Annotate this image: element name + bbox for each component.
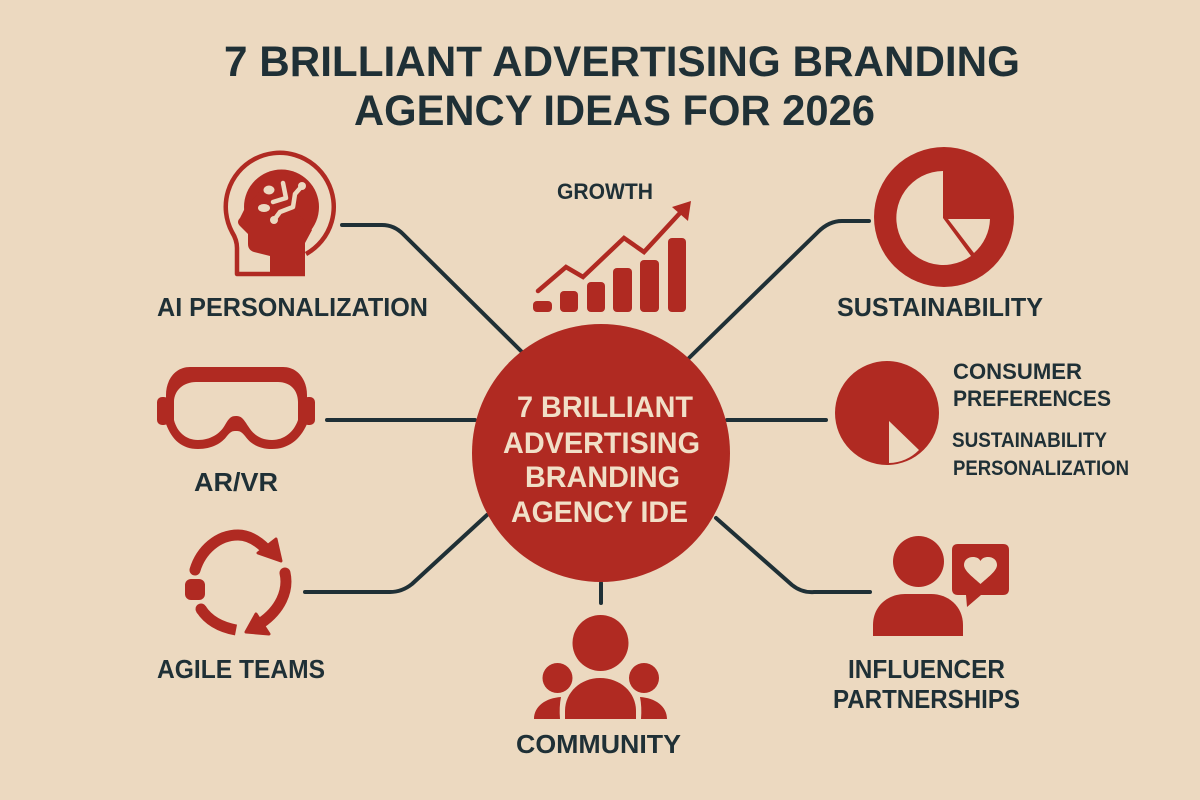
label: PARTNERSHIPS bbox=[833, 684, 1020, 714]
connector: AR/VR bbox=[327, 418, 475, 422]
label: AI PERSONALIZATION bbox=[157, 292, 428, 322]
list: PERSONALIZATION bbox=[953, 457, 1129, 480]
title bbox=[224, 38, 1020, 135]
connector: agile teams bbox=[305, 515, 487, 592]
node: agile teams bbox=[157, 535, 325, 684]
icon: influencer with heart bubble bbox=[873, 536, 1009, 636]
heading bbox=[953, 359, 1111, 411]
label: GROWTH bbox=[557, 179, 653, 204]
label: INFLUENCER bbox=[848, 654, 1005, 684]
connector: AI personalization bbox=[342, 225, 522, 352]
icon: pie chart bbox=[835, 361, 939, 465]
list: SUSTAINABILITY bbox=[952, 429, 1107, 452]
connector: influencer partnerships bbox=[716, 518, 870, 592]
icon: head with circuit brain bbox=[226, 153, 334, 275]
label: AR/VR bbox=[194, 467, 278, 497]
central hub: ADVERTISING bbox=[503, 427, 700, 460]
node: community bbox=[516, 615, 681, 759]
central hub: AGENCY IDE bbox=[511, 496, 688, 529]
heading: CONSUMER bbox=[953, 359, 1082, 384]
heading: PREFERENCES bbox=[953, 386, 1111, 411]
connector: consumer preferences bbox=[727, 418, 826, 422]
node: consumer preferences bbox=[835, 359, 1129, 480]
node: sustainability bbox=[837, 147, 1043, 322]
connector: sustainability bbox=[689, 221, 869, 358]
node: AR/VR bbox=[157, 367, 315, 497]
node: influencer partnerships bbox=[833, 536, 1020, 714]
icon: VR goggles bbox=[157, 367, 315, 449]
icon: growth bar chart with arrow bbox=[533, 201, 691, 312]
central hub: 7 BRILLIANT bbox=[517, 391, 693, 424]
title: AGENCY IDEAS FOR 2026 bbox=[354, 87, 875, 135]
central hub: BRANDING bbox=[525, 461, 680, 494]
node: growth bbox=[533, 179, 691, 312]
label: SUSTAINABILITY bbox=[837, 292, 1043, 322]
connector: community bbox=[599, 583, 603, 603]
title: 7 BRILLIANT ADVERTISING BRANDING bbox=[224, 38, 1020, 86]
list bbox=[952, 429, 1129, 480]
icon: donut pie chart bbox=[874, 147, 1014, 287]
central hub bbox=[472, 324, 730, 582]
label: COMMUNITY bbox=[516, 729, 681, 759]
node: AI personalization bbox=[157, 153, 428, 322]
icon: group of people bbox=[534, 615, 667, 719]
icon: agile cycle arrows bbox=[185, 535, 286, 634]
label: AGILE TEAMS bbox=[157, 654, 325, 684]
label bbox=[833, 654, 1020, 714]
